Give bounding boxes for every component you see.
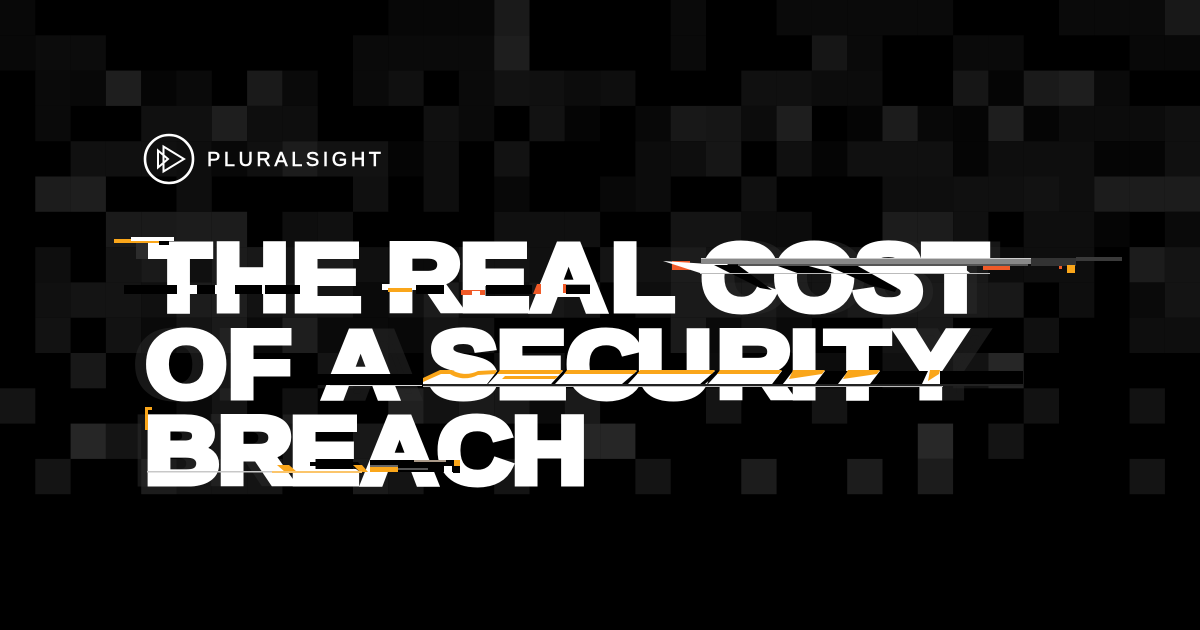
title: The Real Cost of a Security Breach: BREACH (145, 398, 587, 504)
title ghost shadow: AY (345, 312, 988, 418)
glitch band: COST streaks and bars (663, 257, 1122, 292)
background pixel mosaic (0, 0, 1200, 494)
title ghost shadow: BRE (135, 398, 349, 504)
title: The Real Cost of a Security Breach (0, 225, 988, 504)
title ghost shadow (135, 225, 998, 504)
title: The Real Cost of a Security Breach: THE REAL COST (0, 225, 988, 331)
title: The Real Cost of a Security Breach: OF A SECURITY (0, 312, 966, 418)
title ghost shadow: COST (711, 225, 998, 331)
title ghost shadow: OF (135, 312, 280, 418)
glitch band: line one left (114, 237, 590, 295)
glitch band: BREACH lower slice (145, 407, 460, 473)
logo: Pluralsight (145, 135, 381, 183)
glitch band: SECURITY orange slice (312, 370, 1023, 387)
logo: Pluralsight: PLURALSIGHT (207, 149, 381, 171)
